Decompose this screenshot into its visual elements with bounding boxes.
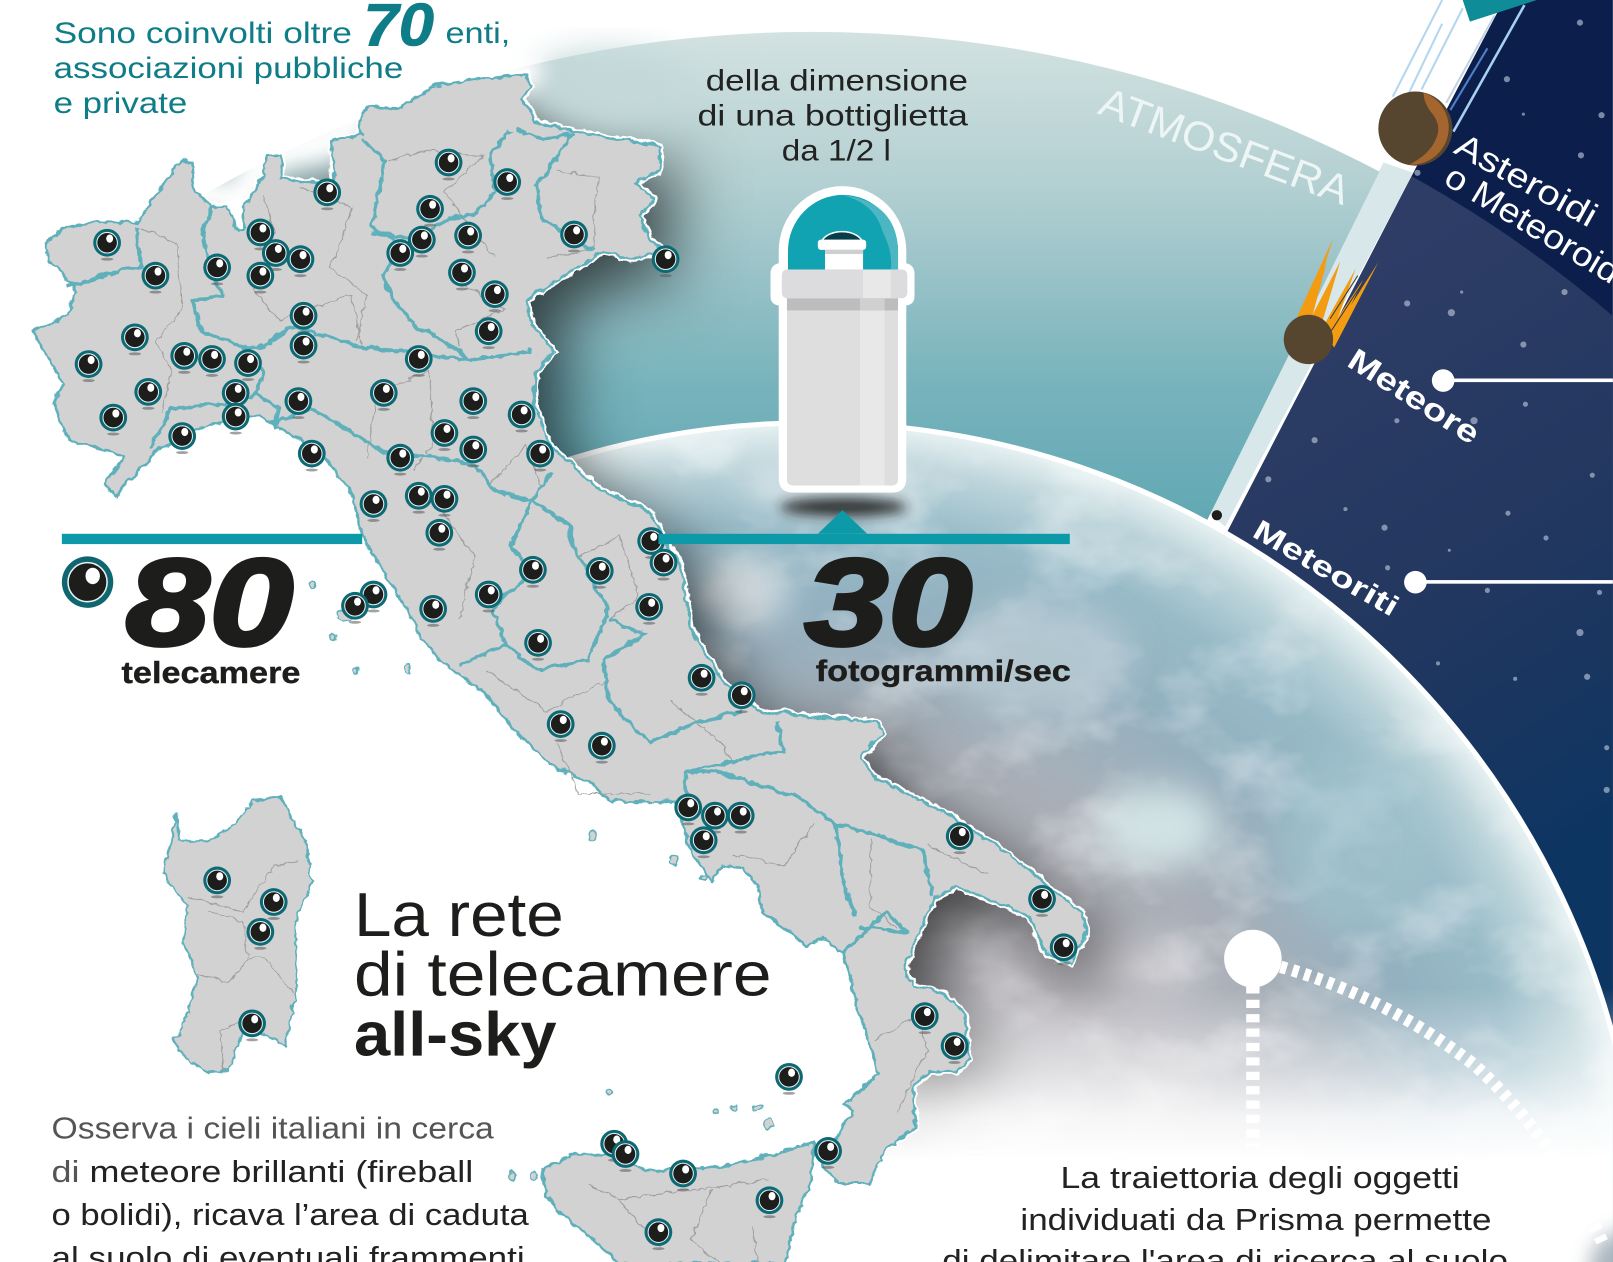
stars: [1265, 20, 1610, 793]
text: partners: e private: [54, 87, 187, 120]
minor islands: [308, 580, 772, 1180]
text: bottle size: [697, 65, 968, 167]
small dark corner of the target area: [1590, 1230, 1613, 1262]
white fade at the bottom of the globe: [0, 987, 1613, 1262]
trajectory of detected objects: [1224, 930, 1603, 1242]
icon: bottle-sized camera: [771, 186, 914, 516]
label: asteroids or meteoroids: o Meteoroidi: [1438, 157, 1613, 296]
text: bottle size: da 1/2 l: [782, 134, 891, 167]
text: partners: associazioni pubbliche: [54, 52, 403, 85]
stat: camera count: [62, 534, 362, 690]
Sicily: [540, 1140, 813, 1262]
asteroid with streaks: [1378, 0, 1537, 166]
Sardinia: [162, 795, 311, 1071]
panel: atmosphere strip: [1207, 163, 1413, 527]
text: trajectory: [942, 1160, 1508, 1262]
label: meteor: [1342, 342, 1613, 451]
heading: all-sky: [354, 1000, 557, 1069]
heading: di telecamere: [354, 941, 772, 1010]
stat: camera count: telecamere: [122, 655, 300, 690]
text: bottle size: di una bottiglietta: [697, 99, 968, 132]
stat: frames per second: [658, 510, 1071, 688]
text: network description: [52, 1111, 530, 1262]
camera markers on the map: [75, 149, 1078, 1250]
panel: deep space background: [1228, 0, 1613, 1026]
text: network description: o bolidi), ricava l’area di caduta: [52, 1197, 530, 1232]
icon: camera lens: [62, 556, 113, 608]
label: asteroids or meteoroids: Asteroidi: [1449, 126, 1604, 235]
panel: atmosphere: [216, 32, 1380, 520]
text: partners: Sono coinvolti oltre: [54, 17, 352, 50]
text: partners: [54, 0, 510, 120]
meteor with flames: [1284, 239, 1378, 364]
text: partners: enti,: [445, 17, 510, 50]
label: meteorites: [1212, 510, 1613, 623]
label: atmosphere: ATMOSFERA: [1093, 78, 1357, 214]
map shadow: [226, 86, 1147, 1133]
text: network description: di meteore brillanti (fireball: [52, 1154, 473, 1189]
text: bottle size: della dimensione: [706, 65, 968, 98]
stat: camera count: 80: [126, 534, 293, 672]
text: trajectory: individuati da Prisma permette: [1020, 1202, 1491, 1237]
label: meteor: Meteore: [1342, 342, 1486, 451]
peninsula: [31, 72, 1085, 1182]
white glow north of the map: [64, 72, 525, 225]
stat: frames per second: fotogrammi/sec: [816, 655, 1071, 688]
stat: frames per second: 30: [804, 534, 972, 672]
text: trajectory: La traiettoria degli oggetti: [1061, 1160, 1460, 1195]
white sea area west of the peninsula: [0, 0, 876, 1262]
map: Italy: [31, 72, 1085, 1262]
text: network description: Osserva i cieli italiani in cerca: [52, 1111, 495, 1146]
panel: earth: [0, 411, 1613, 1262]
heading: [354, 881, 772, 1069]
label: meteorites: Meteoriti: [1247, 514, 1404, 623]
atmosphere relief above the map's north-east corner: [525, 50, 689, 124]
heading: La rete: [354, 881, 564, 950]
